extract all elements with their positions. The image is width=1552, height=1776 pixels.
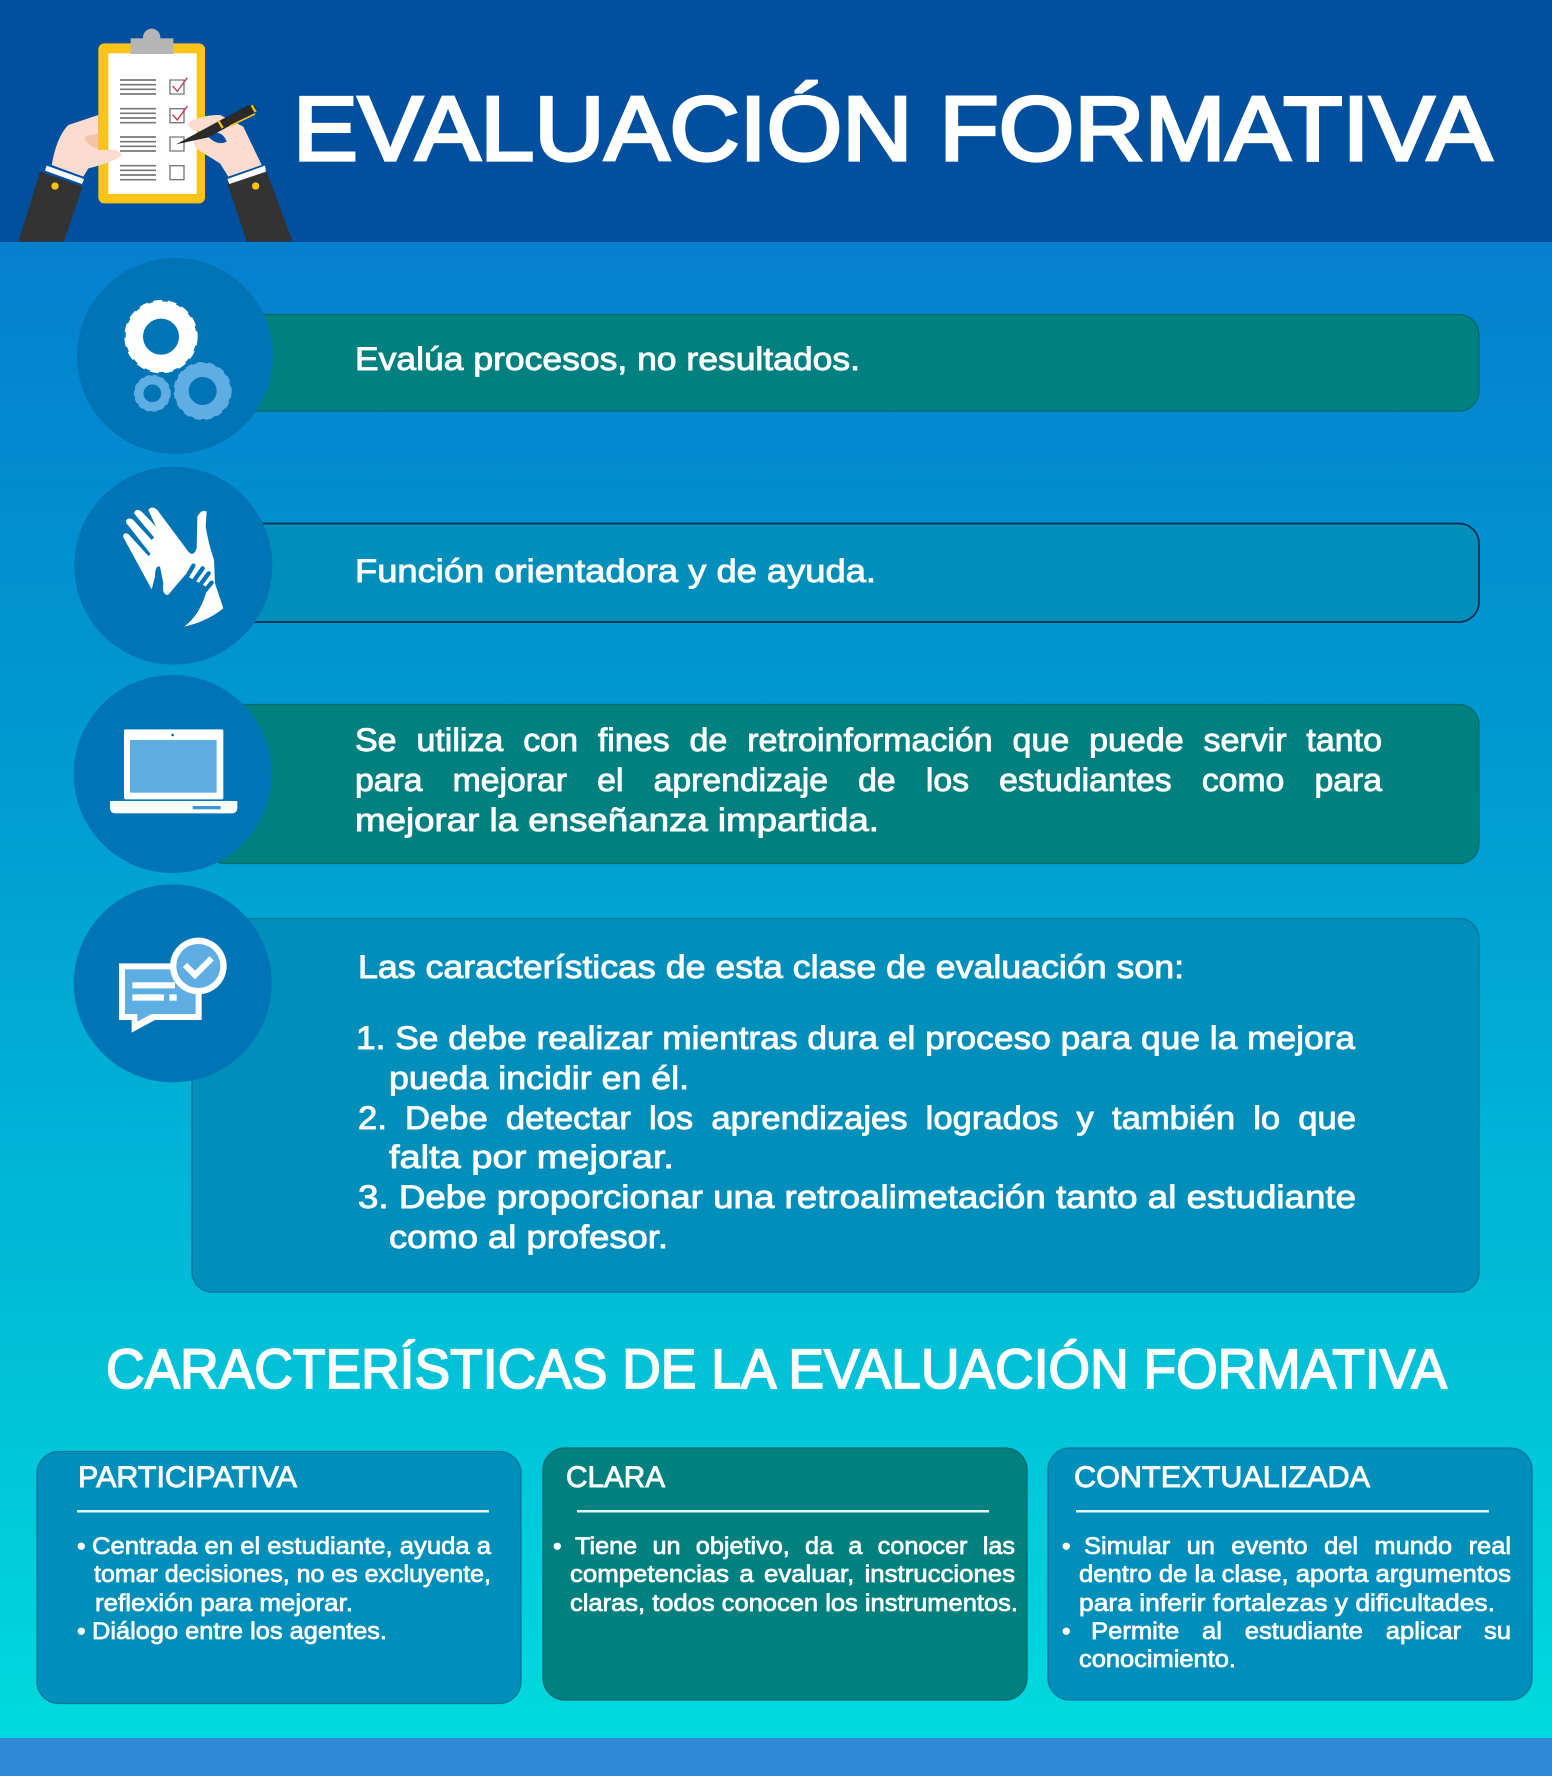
text: numbered list: 3. Debe proporcionar una retroalimetación tanto al estudiante	[358, 1179, 1356, 1215]
text: numbered list	[356, 1020, 1356, 1255]
text: intro: Las características de esta clase de evaluación son:	[358, 949, 1184, 985]
heading: participativa: PARTICIPATIVA	[78, 1461, 297, 1494]
panel: participativa	[37, 1452, 521, 1704]
text: contextualizada: Permite al estudiante aplicar su	[1091, 1618, 1511, 1645]
heading: contextualizada: CONTEXTUALIZADA	[1074, 1461, 1370, 1494]
icon: hands in circle	[74, 467, 272, 665]
panel: evalúa procesos	[205, 314, 1479, 411]
text: retroinformación: mejorar la enseñanza impartida.	[355, 802, 879, 838]
text: participativa: •	[77, 1618, 86, 1645]
text: contextualizada: Simular un evento del mundo real	[1084, 1533, 1511, 1560]
text: clara: Tiene un objetivo, da a conocer las	[575, 1533, 1015, 1560]
footer band	[0, 1738, 1552, 1776]
text: participativa	[77, 1533, 491, 1645]
icon: chat bubble with check in circle	[74, 884, 272, 1082]
text: numbered list: como al profesor.	[389, 1219, 668, 1255]
text: contextualizada: conocimiento.	[1079, 1646, 1236, 1673]
text: contextualizada: •	[1062, 1533, 1071, 1560]
text: participativa: •	[77, 1533, 86, 1560]
text: participativa: Centrada en el estudiante, ayuda a	[92, 1533, 491, 1560]
text: retroinformación	[355, 722, 1383, 838]
text: contextualizada: dentro de la clase, aporta argumentos	[1079, 1561, 1511, 1588]
text: contextualizada: para inferir fortalezas y dificultades.	[1079, 1590, 1495, 1617]
section heading: CARACTERÍSTICAS DE LA EVALUACIÓN FORMATIVA	[106, 1337, 1448, 1400]
text: numbered list: 1. Se debe realizar mientras dura el proceso para que la mejora	[356, 1020, 1356, 1056]
panel: función orientadora	[205, 524, 1479, 622]
icon: clipboard held by two hands	[18, 29, 293, 242]
panel: retroinformación	[205, 704, 1479, 864]
title: EVALUACIÓN FORMATIVA	[293, 79, 1492, 180]
text: contextualizada: •	[1062, 1618, 1071, 1645]
text: clara: •	[553, 1533, 562, 1560]
panel: características numeradas	[192, 918, 1479, 1292]
heading: clara: CLARA	[566, 1461, 665, 1494]
text: clara: claras, todos conocen los instrumentos.	[570, 1590, 1018, 1617]
panel: contextualizada	[1048, 1448, 1532, 1700]
icon: laptop in circle	[74, 675, 272, 873]
text: retroinformación: para mejorar el aprendizaje de los estudiantes como para	[355, 762, 1383, 798]
text: función orientadora: Función orientadora y de ayuda.	[355, 553, 876, 589]
text: participativa: Diálogo entre los agentes.	[92, 1618, 387, 1645]
text: retroinformación: Se utiliza con fines de retroinformación que puede servir tanto	[355, 722, 1382, 758]
text: numbered list: falta por mejorar.	[389, 1139, 674, 1175]
text: contextualizada	[1062, 1533, 1511, 1673]
header band	[0, 0, 1552, 242]
text: numbered list: pueda incidir en él.	[389, 1060, 689, 1096]
text: clara	[553, 1533, 1018, 1617]
text: numbered list: 2. Debe detectar los aprendizajes logrados y también lo que	[358, 1100, 1356, 1136]
text: clara: competencias a evaluar, instrucciones	[570, 1561, 1015, 1588]
text: participativa: reflexión para mejorar.	[95, 1590, 353, 1617]
text: participativa: tomar decisiones, no es excluyente,	[94, 1561, 491, 1588]
panel: clara	[543, 1448, 1027, 1700]
text: evalúa procesos: Evalúa procesos, no resultados.	[355, 341, 860, 377]
icon: gears in circle	[77, 258, 273, 454]
